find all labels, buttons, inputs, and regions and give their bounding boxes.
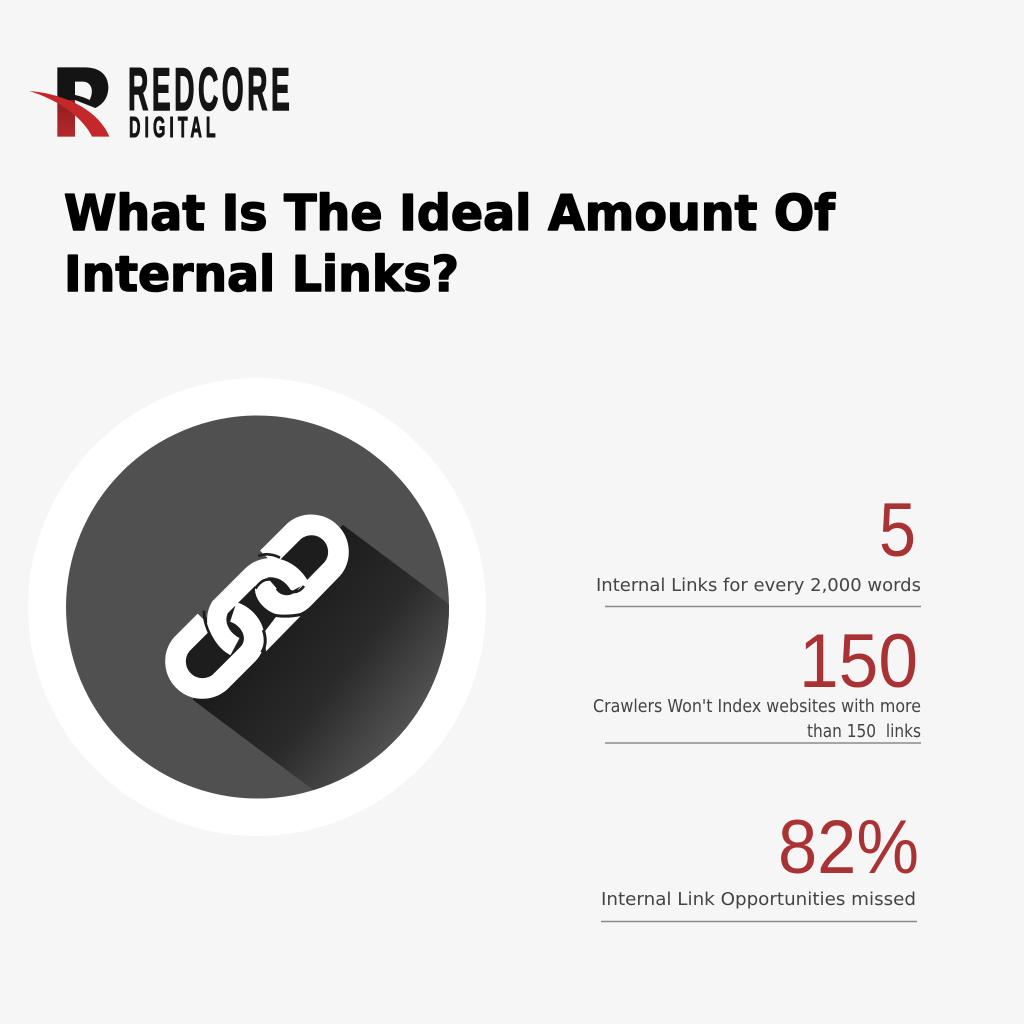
chain: [176, 525, 338, 688]
label: Internal Link Opportunities missed: [601, 889, 916, 910]
logo subtitle: DIGITAL: [129, 111, 220, 143]
label: Crawlers Won't Index websites with more: [593, 696, 921, 717]
stat: 82%: [601, 805, 919, 922]
title: Internal Links?: [64, 246, 459, 303]
logo mark: R with red swoosh: [29, 67, 109, 137]
long shadow: [193, 525, 449, 790]
stat: 150: than 150 links: [807, 721, 921, 742]
dark inner circle: [66, 416, 449, 798]
number: 150: [799, 619, 918, 704]
number: 82%: [778, 805, 919, 890]
logo wordmark: REDCORE: [128, 56, 293, 123]
logo: Redcore Digital: [29, 56, 293, 143]
label: Internal Links for every 2,000 words: [596, 575, 921, 596]
white outer circle: [28, 378, 486, 836]
stat: 150: [593, 619, 921, 743]
stat: 5: [596, 488, 921, 606]
title: [64, 185, 836, 303]
number: 5: [879, 488, 916, 573]
icon: chain link in circle: [28, 378, 486, 836]
title: What Is The Ideal Amount Of: [64, 185, 836, 242]
